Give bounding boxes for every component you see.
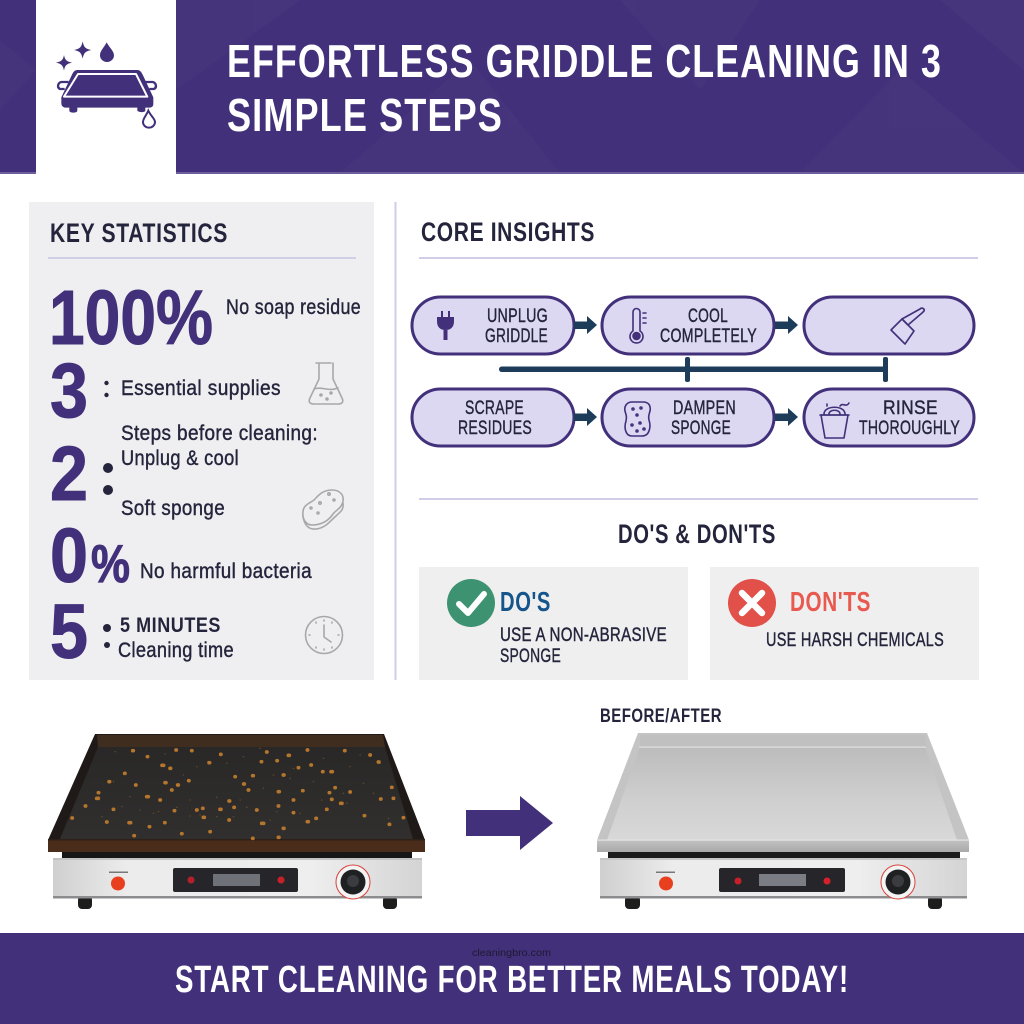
stat: 5 minutes cleaning time: 5 MINUTES <box>120 614 221 637</box>
icon: clock <box>306 616 342 654</box>
stat: 2 steps before cleaning: 2 <box>50 431 88 517</box>
stat: 5 minutes cleaning time: Cleaning time <box>118 639 234 662</box>
panel: key statistics <box>29 202 374 680</box>
icon: sponge <box>303 490 343 529</box>
step: cool completely <box>602 297 774 354</box>
icon: red cross <box>728 579 776 627</box>
stat: 5 minutes cleaning time <box>50 589 234 675</box>
arrow <box>574 316 597 334</box>
step: rinse thoroughly: THOROUGHLY <box>859 418 960 439</box>
step: scraper icon <box>804 297 974 354</box>
step: unplug griddle: UNPLUG <box>487 306 548 327</box>
icon: flask <box>309 363 343 404</box>
header banner <box>0 0 1024 174</box>
text: do advice: USE A NON-ABRASIVE <box>500 625 667 646</box>
stat: 3 essential supplies: 3 <box>50 348 88 434</box>
stat: 0% no harmful bacteria <box>50 513 312 599</box>
label: don'ts: DON'TS <box>790 586 871 617</box>
step: unplug griddle <box>412 297 574 354</box>
step: dampen sponge <box>602 389 774 446</box>
step: scrape residues <box>412 389 574 446</box>
flow chart: cleaning steps <box>412 297 974 446</box>
panel: don'ts <box>710 567 979 680</box>
title <box>227 35 942 141</box>
arrow <box>775 316 798 334</box>
arrow: before to after <box>466 796 553 850</box>
stat: 5 minutes cleaning time: 5 <box>50 589 88 675</box>
step: rinse thoroughly <box>804 389 974 446</box>
arrow <box>775 408 798 426</box>
footer banner <box>0 933 1024 1024</box>
text: do advice: SPONGE <box>500 646 561 667</box>
stat: 2 steps before cleaning: Soft sponge <box>121 497 225 520</box>
icon: green check <box>447 579 495 627</box>
label: before/after: BEFORE/AFTER <box>600 706 722 727</box>
step: scrape residues: SCRAPE <box>465 398 524 419</box>
stat: 100% no soap residue <box>49 275 361 361</box>
food residue <box>72 748 404 838</box>
step: cool completely: COMPLETELY <box>660 326 757 347</box>
step: dampen sponge: DAMPEN <box>673 398 736 419</box>
heading: core insights: CORE INSIGHTS <box>421 217 595 247</box>
step: unplug griddle: GRIDDLE <box>485 326 548 347</box>
stat: 2 steps before cleaning: Unplug & cool <box>121 447 239 470</box>
text: do advice <box>500 625 667 667</box>
stat: 0% no harmful bacteria: % <box>91 535 130 594</box>
step: rinse thoroughly: RINSE <box>883 398 938 419</box>
stat: 2 steps before cleaning: Steps before cleaning: <box>121 422 318 445</box>
label: do's: DO'S <box>500 586 551 617</box>
stat: 0% no harmful bacteria: No harmful bacteria <box>140 560 312 583</box>
stat: 3 essential supplies <box>50 348 281 434</box>
heading: key statistics: KEY STATISTICS <box>50 218 228 248</box>
control panel <box>656 865 915 899</box>
stat: 0% no harmful bacteria: 0 <box>50 513 88 599</box>
heading: do's and don'ts: DO'S & DON'TS <box>618 519 776 549</box>
photo: clean griddle after <box>597 733 969 909</box>
panel: do's <box>419 567 688 680</box>
stat: 100% no soap residue: No soap residue <box>226 296 361 319</box>
step: scrape residues: RESIDUES <box>458 418 532 439</box>
stat: 3 essential supplies: Essential supplies <box>121 377 281 400</box>
text: don't advice: USE HARSH CHEMICALS <box>766 630 944 651</box>
control panel <box>109 865 370 899</box>
step: dampen sponge: SPONGE <box>671 418 731 439</box>
photo: dirty griddle before <box>48 734 425 909</box>
step: cool completely: COOL <box>688 306 728 327</box>
connector bar <box>499 357 888 382</box>
title: SIMPLE STEPS <box>227 89 503 141</box>
source credit: cleaningbro.com <box>472 948 551 959</box>
stat: 100% no soap residue: 100% <box>49 275 213 361</box>
stat: 2 steps before cleaning <box>50 422 318 520</box>
arrow <box>574 408 597 426</box>
logo tile with griddle icon <box>36 0 176 174</box>
